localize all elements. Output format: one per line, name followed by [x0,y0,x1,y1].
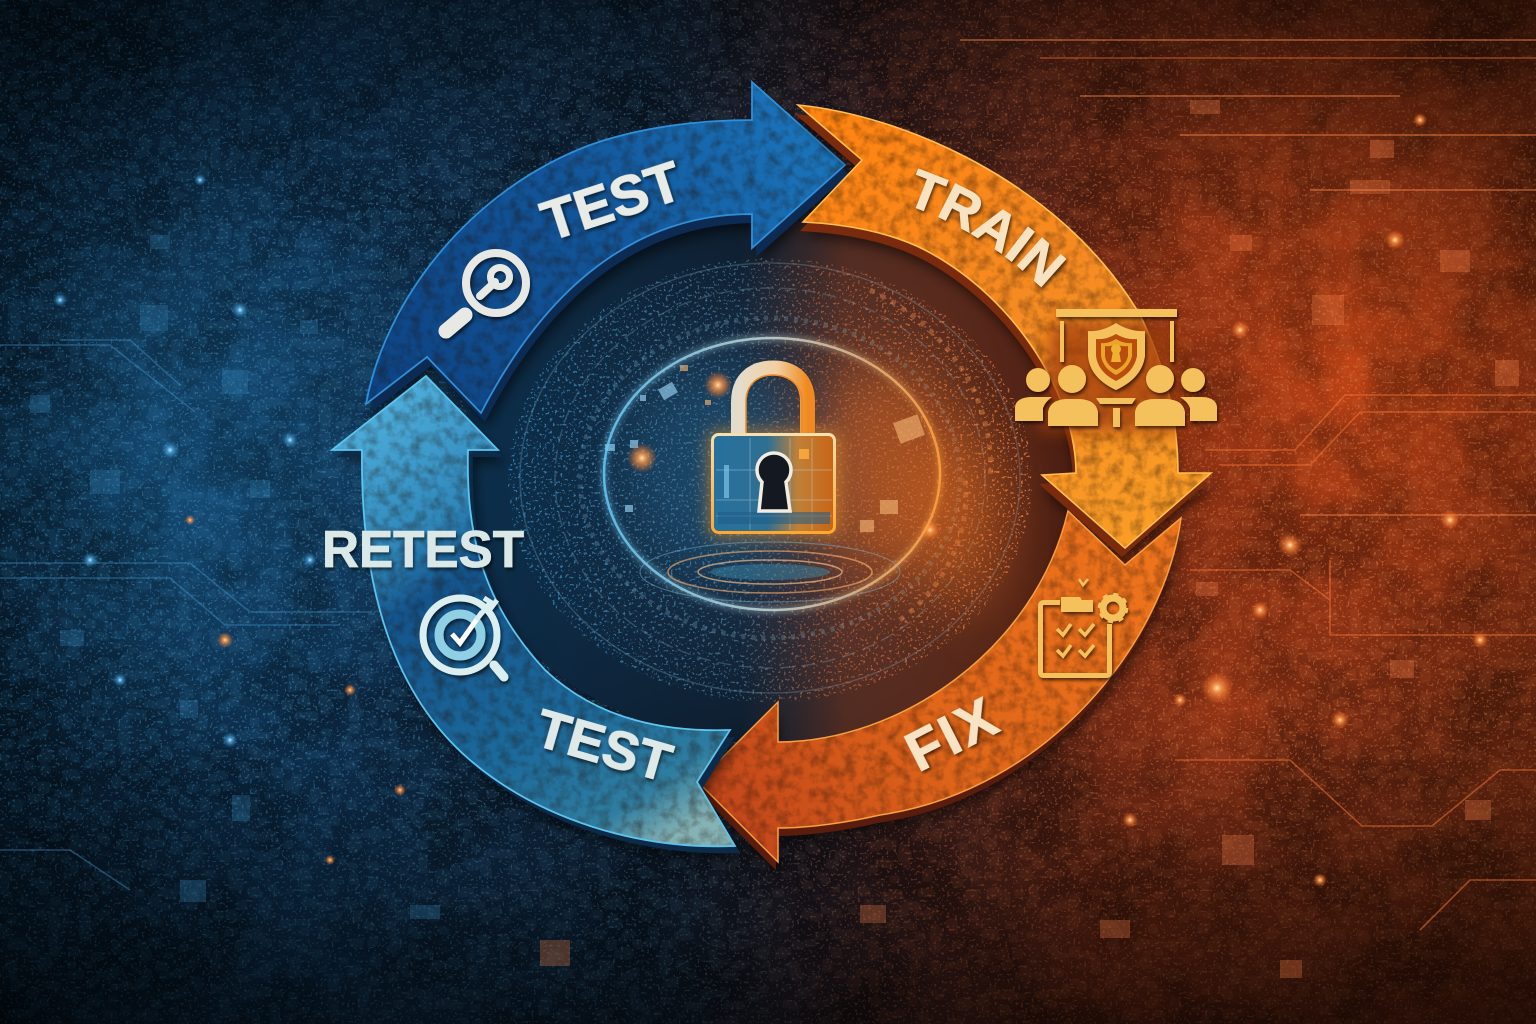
arrow: fix (red-orange) [696,511,1181,870]
label: lower TEST: TEST [529,698,678,794]
bokeh particles [53,113,1488,887]
icon: magnifier [446,253,526,331]
padlock icon [708,368,840,538]
label: TEST: TEST [533,148,689,253]
icon backing patch [1036,322,1188,432]
icon: training group with shield [1015,309,1217,427]
icon: target with check and magnifier [423,598,504,677]
arrow: train (orange) [795,104,1220,564]
holographic platform [640,542,900,602]
glowing ring [604,338,940,610]
label: FIX: FIX [895,684,1009,783]
arrow: retest (light blue) [322,376,740,853]
label: TRAIN: TRAIN [916,168,1070,292]
icon: checklist with gear [1040,579,1126,676]
label: RETEST: RETEST [322,521,524,579]
arrow: test (blue) [366,82,849,422]
central cyber disc [458,220,1082,744]
